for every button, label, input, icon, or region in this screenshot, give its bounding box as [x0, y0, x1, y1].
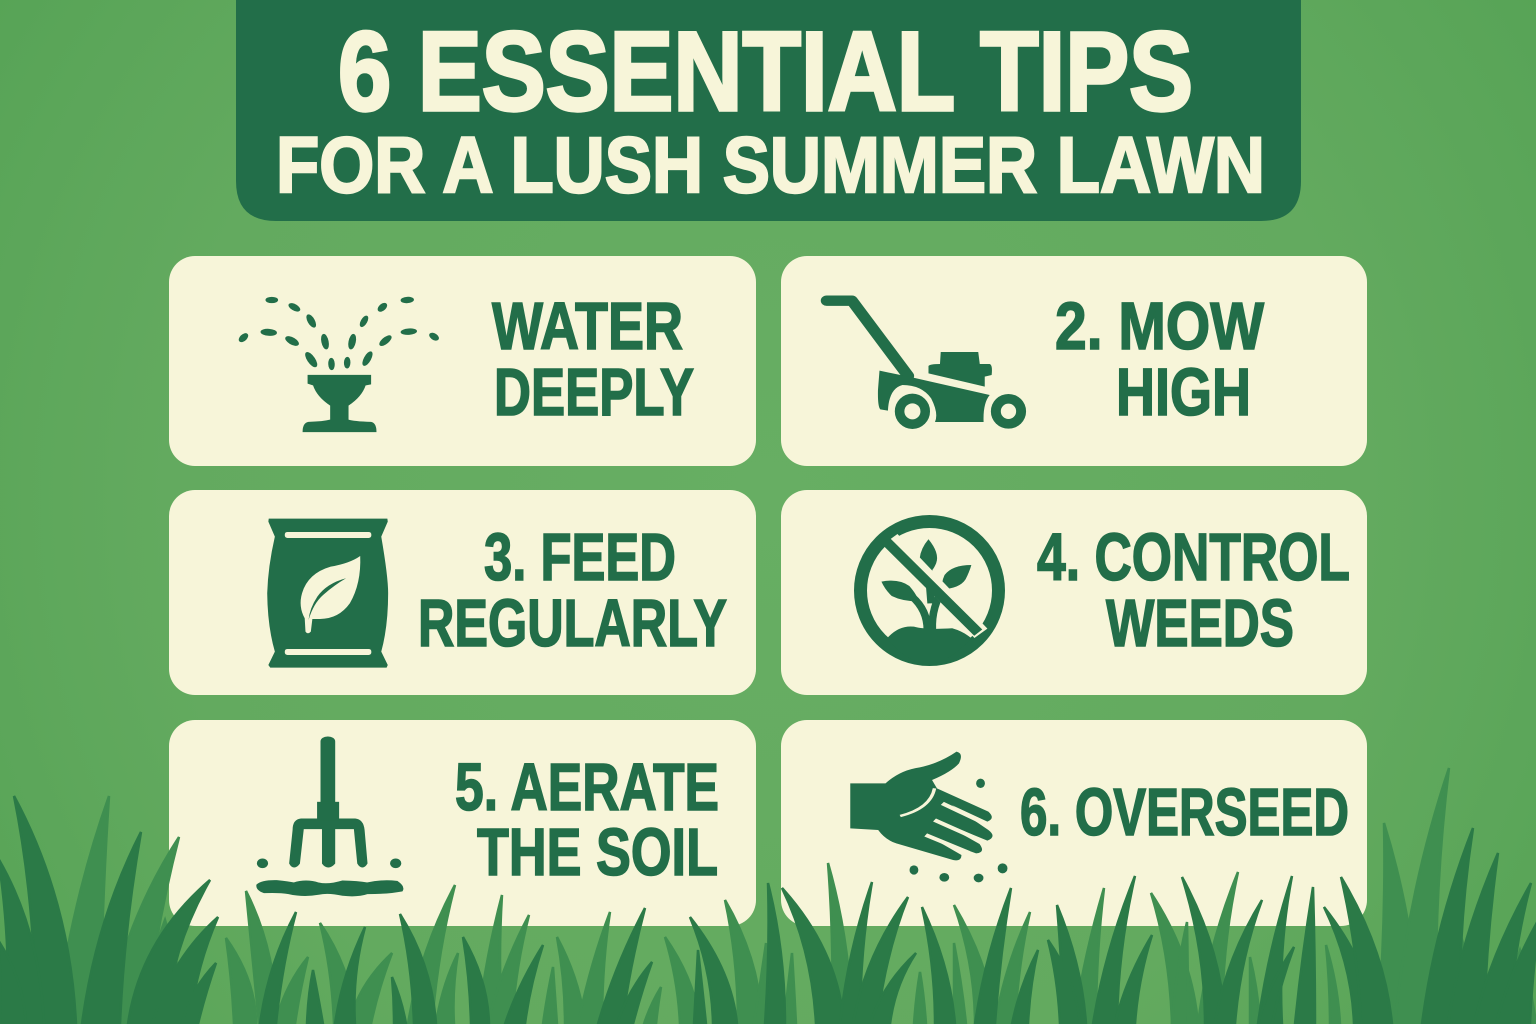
icon: lawn mower	[827, 301, 1026, 429]
panel: tip 6 overseed	[781, 720, 1367, 926]
grass: lighter blades	[20, 768, 1536, 1024]
label: 4. CONTROL	[1037, 520, 1350, 595]
label: WEEDS	[1106, 586, 1294, 661]
label: 3. FEED	[484, 520, 676, 595]
label: 5. AERATE	[455, 750, 719, 825]
label: HIGH	[1116, 355, 1251, 430]
label	[492, 289, 694, 430]
icon: garden fork	[258, 737, 402, 896]
title line 1: 6 ESSENTIAL TIPS	[338, 9, 1193, 134]
label: REGULARLY	[418, 586, 727, 661]
label: 6. OVERSEED	[1020, 775, 1349, 850]
panel: tip 3 feed regularly	[169, 490, 756, 695]
panel: tip 2 mow high	[781, 256, 1367, 466]
label: 2. MOW	[1055, 289, 1265, 364]
icon: fertilizer bag	[267, 519, 388, 668]
panel: tip 5 aerate the soil	[169, 720, 756, 926]
label: WATER	[492, 289, 683, 364]
icon: no weeds	[860, 522, 998, 663]
title line 2: FOR A LUSH SUMMER LAWN	[276, 120, 1265, 209]
grass: darker blades	[0, 796, 1536, 1024]
label	[1037, 520, 1350, 661]
panel: tip 4 control weeds	[781, 490, 1367, 695]
label	[1055, 289, 1265, 430]
icon: hand scattering seed	[850, 752, 1007, 882]
title banner	[236, 0, 1301, 221]
label	[455, 750, 719, 890]
label: DEEPLY	[494, 355, 694, 430]
icon: sprinkler	[238, 297, 440, 432]
panel: tip 1 water deeply	[169, 256, 756, 466]
label: THE SOIL	[477, 815, 718, 890]
label	[418, 520, 727, 661]
